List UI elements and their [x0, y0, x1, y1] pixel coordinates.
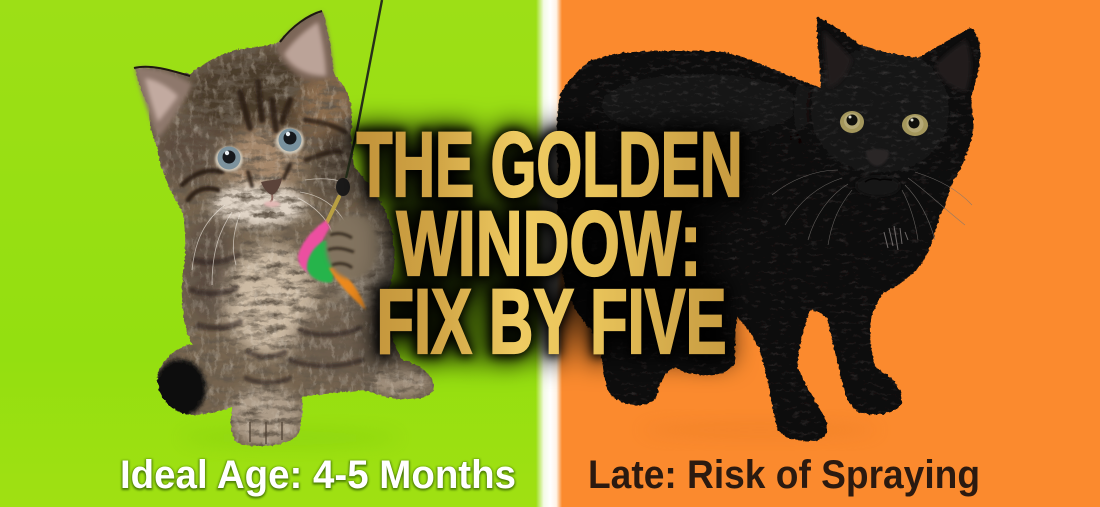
black cat whiskers	[772, 170, 972, 245]
photo: tabby kitten with toy	[130, 0, 440, 455]
caption: ideal age shadow: Ideal Age: 4-5 Months	[120, 454, 516, 498]
kitten left eye	[215, 146, 243, 172]
black cat right ear	[936, 40, 971, 92]
panel: green background	[0, 0, 546, 507]
title: FIX BY FIVE	[376, 271, 726, 373]
black cat silhouette	[550, 10, 990, 450]
title shadow core: THE GOLDEN	[354, 114, 744, 216]
kitten left ear	[134, 67, 192, 138]
title shadow glow: THE GOLDEN	[354, 115, 744, 217]
kitten front paw toes	[250, 422, 282, 444]
title: WINDOW:	[396, 193, 702, 295]
toy orange feather	[329, 266, 366, 310]
title: THE GOLDEN	[356, 114, 742, 216]
kitten whiskers	[192, 179, 345, 285]
title shadow glow: WINDOW:	[395, 194, 703, 296]
black cat left eye	[840, 111, 864, 133]
title shadow glow: FIX BY FIVE	[374, 272, 728, 374]
caption: late risk: Late: Risk of Spraying	[588, 453, 980, 497]
black cat chest patch	[884, 226, 908, 250]
toy feather stick	[327, 197, 339, 222]
kitten body silhouette	[130, 5, 440, 455]
title	[356, 114, 742, 373]
toy wand string	[346, 0, 382, 178]
kitten nose and mouth	[261, 178, 282, 207]
toy bead	[336, 178, 350, 196]
black cat right eye	[902, 114, 928, 136]
toy green feather	[307, 240, 334, 282]
photo: black cat	[550, 10, 990, 450]
kitten right ear	[276, 11, 334, 80]
title shadow core: FIX BY FIVE	[374, 271, 728, 373]
black cat left ear	[823, 30, 852, 88]
kitten raised paw	[326, 215, 378, 279]
kitten right eye	[276, 128, 304, 154]
kitten tabby stripes	[182, 82, 362, 382]
black cat nose and mouth	[856, 149, 900, 196]
title shadow core: WINDOW:	[395, 193, 703, 295]
caption: ideal age: Ideal Age: 4-5 Months	[120, 453, 516, 497]
title shadow glow	[354, 115, 744, 374]
panel: orange background	[556, 0, 1100, 507]
title shadow core	[354, 114, 744, 373]
toy pink feather	[298, 220, 330, 274]
divider: white glow strip	[536, 0, 562, 507]
